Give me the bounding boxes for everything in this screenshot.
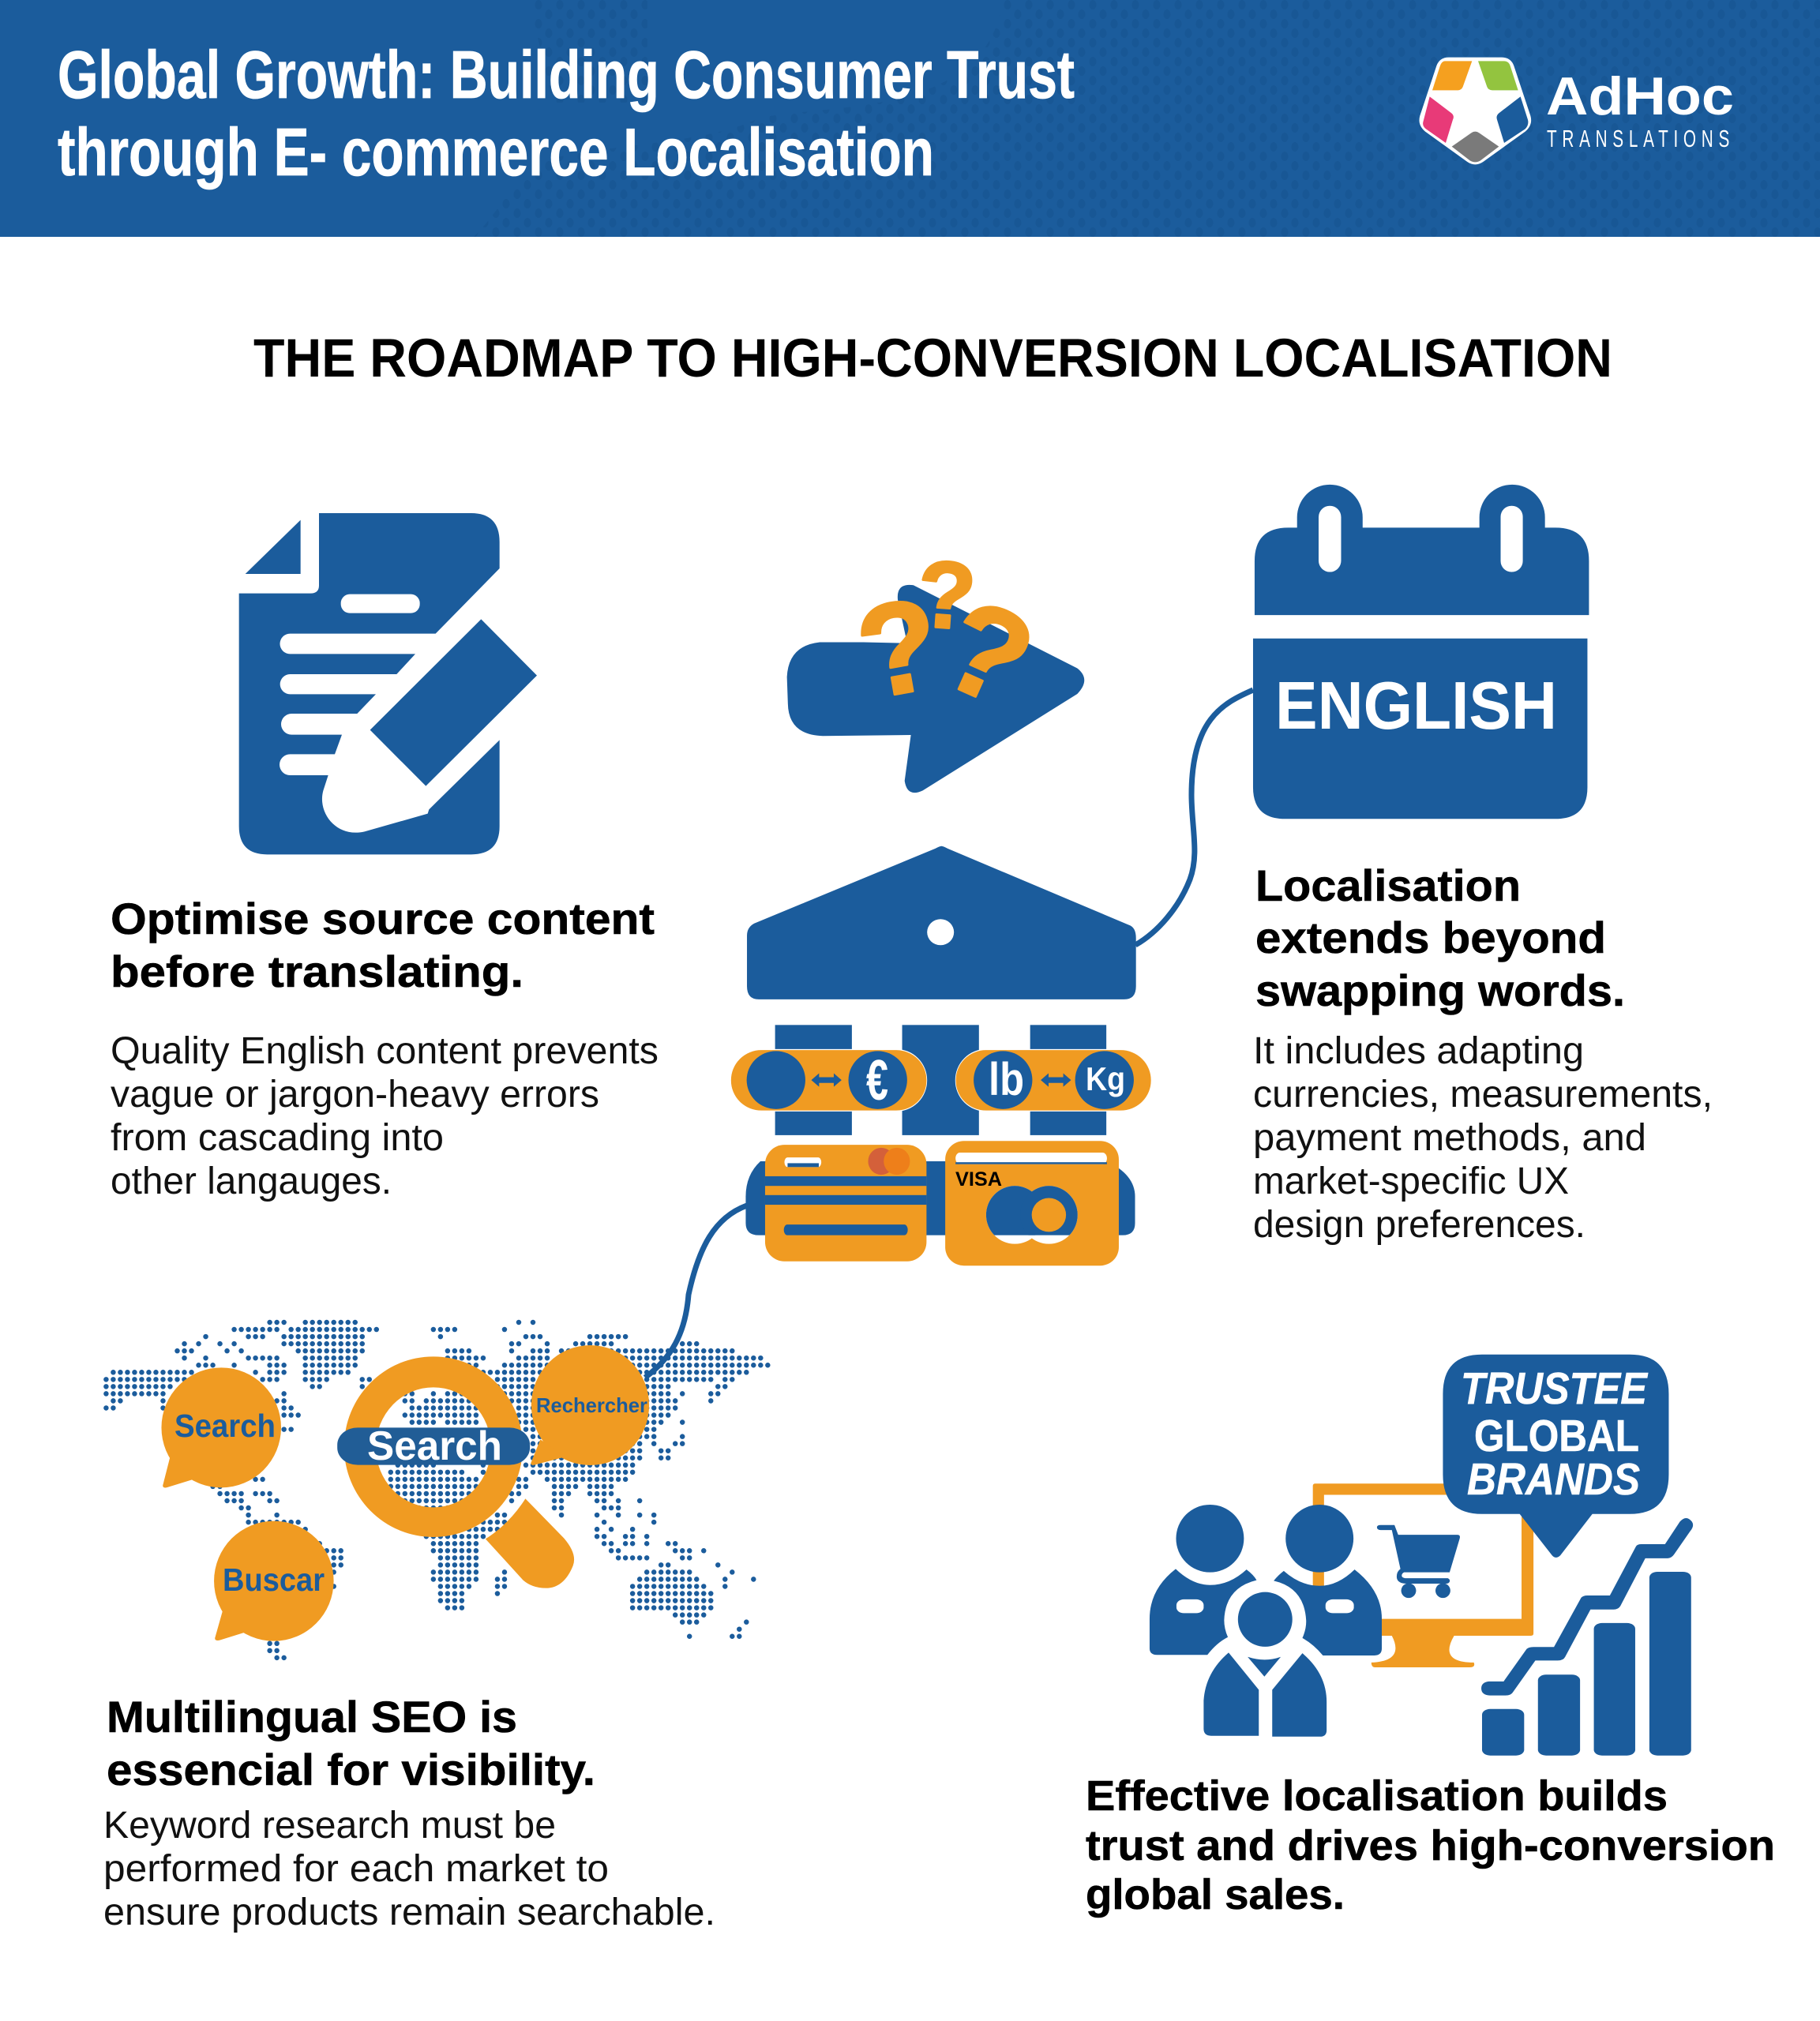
logo: AdHoc Translations <box>1419 58 1735 164</box>
text block: optimise source content: Optimise source content <box>111 894 655 943</box>
text block: localisation extends beyond: market-specific UX <box>1253 1160 1569 1202</box>
text block: localisation extends beyond: extends beyond <box>1255 913 1606 962</box>
world map with search bubbles: Search <box>367 1423 502 1469</box>
text block: localisation extends beyond: payment methods, and <box>1253 1117 1646 1159</box>
icon: arrow with question marks: ? <box>914 541 979 650</box>
icon: trusted brands, customers, monitor and growth chart: BRANDS <box>1467 1454 1640 1505</box>
main heading: THE ROADMAP TO HIGH-CONVERSION LOCALISATION <box>253 328 1612 388</box>
dotted world map <box>106 1322 768 1658</box>
speech bubble <box>1443 1355 1668 1558</box>
text block: multilingual SEO: ensure products remain searchable. <box>103 1892 715 1933</box>
icon: document with pencil <box>239 513 537 854</box>
text block: optimise source content: before translating. <box>111 947 523 996</box>
icon: calendar labelled English: ENGLISH <box>1275 669 1557 744</box>
connector: bank to world map <box>645 1205 747 1378</box>
title: Global Growth: Building Consumer Trust <box>58 38 1075 113</box>
title: through E- commerce Localisation <box>58 115 934 190</box>
text block: localisation extends beyond: Localisation <box>1255 861 1521 910</box>
text block: multilingual SEO: Keyword research must be <box>103 1805 556 1847</box>
icon: arrow with question marks <box>787 541 1084 793</box>
logo: AdHoc Translations: AdHoc <box>1546 66 1734 126</box>
text block: optimise source content: Quality English content prevents <box>111 1030 659 1072</box>
text block: multilingual SEO: Multilingual SEO is <box>107 1692 517 1742</box>
text block: multilingual SEO: performed for each market to <box>103 1848 609 1890</box>
text block: localisation extends beyond <box>1253 861 1713 1246</box>
connector: calendar to bank <box>1135 690 1253 945</box>
text block: localisation extends beyond: swapping words. <box>1255 966 1625 1015</box>
visa card <box>945 1141 1119 1265</box>
currency converter pill <box>730 1050 927 1111</box>
icon: arrow with question marks: ? <box>922 570 1054 735</box>
icon: arrow with question marks: ? <box>846 570 951 726</box>
magnifying glass and speech bubbles <box>161 1345 649 1641</box>
world map with search bubbles: Buscar <box>223 1562 325 1598</box>
icon: trusted brands, customers, monitor and growth chart: TRUSTEE <box>1461 1363 1649 1414</box>
people <box>1150 1505 1382 1737</box>
title <box>58 38 1075 190</box>
text block: optimise source content: vague or jargon-heavy errors <box>111 1074 599 1115</box>
world map with search bubbles: Search <box>174 1408 276 1444</box>
icon: trusted brands, customers, monitor and growth chart: GLOBAL <box>1474 1411 1639 1461</box>
icon: bank with currency and unit converters and payment cards: Kg <box>1086 1060 1125 1097</box>
text block: localisation extends beyond: currencies, measurements, <box>1253 1074 1713 1115</box>
header banner <box>0 0 1820 237</box>
credit card <box>765 1145 926 1262</box>
text block: multilingual SEO <box>103 1692 715 1933</box>
icon: bank with currency and unit converters and payment cards <box>730 846 1151 1265</box>
icon: bank with currency and unit converters and payment cards: VISA <box>955 1168 1002 1190</box>
unit converter pill <box>955 1050 1151 1111</box>
text block: effective localisation <box>1086 1772 1775 1918</box>
text block: effective localisation: trust and drives high-conversion <box>1086 1822 1775 1869</box>
text block: localisation extends beyond: design preferences. <box>1253 1204 1585 1246</box>
world map with search bubbles: Rechercher <box>536 1393 647 1417</box>
text block: localisation extends beyond: It includes adapting <box>1253 1030 1584 1072</box>
text block: effective localisation: global sales. <box>1086 1871 1345 1918</box>
bank pediment <box>747 846 1136 999</box>
text block: multilingual SEO: essencial for visibility. <box>107 1745 595 1794</box>
icon: trusted brands, customers, monitor and growth chart <box>1150 1355 1693 1756</box>
growth bars and arrow <box>1443 1355 1693 1756</box>
text block: effective localisation: Effective localisation builds <box>1086 1772 1668 1820</box>
monitor with cart <box>1313 1483 1533 1667</box>
world map with search bubbles <box>106 1322 768 1658</box>
icon: bank with currency and unit converters and payment cards: € <box>866 1049 888 1112</box>
icon: calendar labelled English <box>1253 485 1589 819</box>
icon: bank with currency and unit converters and payment cards: lb <box>989 1054 1024 1105</box>
text block: optimise source content: from cascading into <box>111 1117 444 1159</box>
text block: optimise source content <box>111 894 659 1202</box>
logo: AdHoc Translations: TRANSLATIONS <box>1547 125 1735 152</box>
text block: optimise source content: other langauges. <box>111 1160 392 1202</box>
